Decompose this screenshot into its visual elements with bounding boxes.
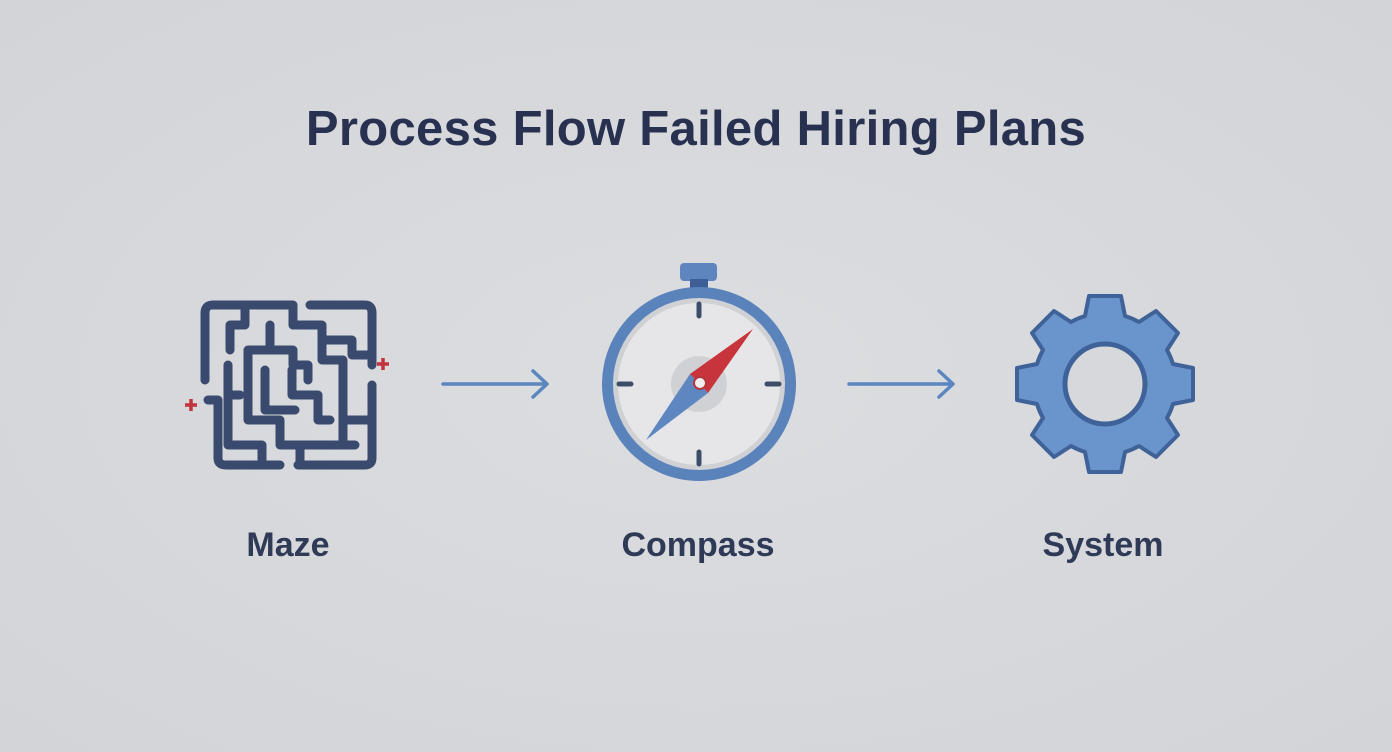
- arrow 1: [443, 371, 547, 397]
- icon: red plus markers: [185, 358, 389, 411]
- icon: gear: [1017, 296, 1193, 472]
- title: Process Flow Failed Hiring Plans: [306, 102, 1086, 156]
- label: System: System: [1043, 526, 1163, 564]
- icon: compass: [602, 263, 796, 481]
- arrow 2: [849, 371, 953, 397]
- icon: maze: [205, 305, 372, 465]
- label: Compass: Compass: [621, 526, 775, 564]
- label: Maze: Maze: [246, 526, 330, 564]
